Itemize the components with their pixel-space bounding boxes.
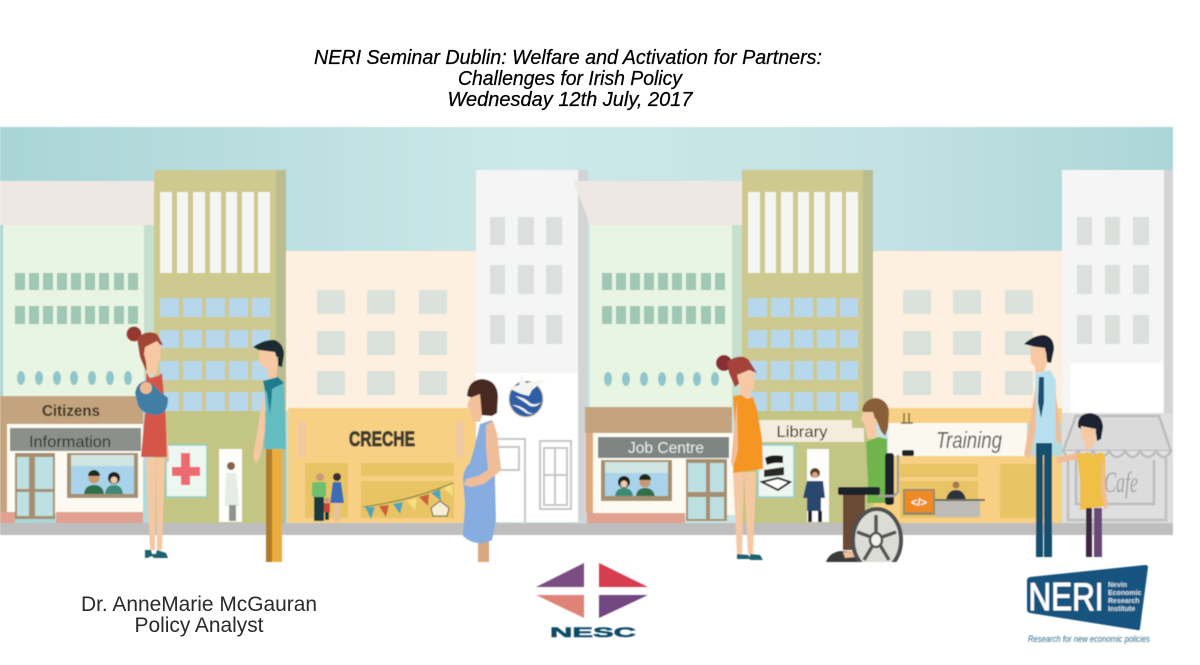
title: Wednesday 12th July, 2017 (448, 89, 693, 111)
icon: books panel (758, 445, 794, 497)
logo: NERI: Research (1108, 598, 1140, 605)
logo: NERI: Economic (1108, 590, 1142, 597)
logo: NERI (1027, 565, 1150, 644)
shop: Job Centre (585, 407, 735, 523)
person: woman with baby (126, 326, 169, 558)
author credit (81, 593, 317, 637)
shop: Creche: CRECHE (349, 428, 415, 451)
logo: NERI: NERI (1028, 576, 1104, 619)
person: man in teal shirt (253, 340, 286, 562)
title (314, 47, 822, 111)
logo: NESC: NESC (550, 624, 636, 640)
logo: NESC (536, 563, 648, 640)
building: right green office (573, 181, 742, 407)
title: Challenges for Irish Policy (458, 68, 683, 90)
shop: Creche (288, 408, 476, 525)
building: centre white (476, 170, 588, 522)
bunting (363, 483, 453, 519)
child in doorway (803, 449, 829, 522)
icon: red cross panel (166, 445, 207, 497)
shop: Citizens Information: Citizens (42, 403, 100, 420)
window with two staff (601, 460, 672, 501)
shop: Training: Training (936, 427, 1002, 453)
icon: orange laptop (903, 489, 935, 515)
shop: Citizens Information (0, 396, 143, 523)
shop: Job Centre: Job Centre (628, 440, 704, 457)
building: left olive tower (154, 170, 286, 525)
logo: NERI: Research for new economic policies (1028, 634, 1150, 644)
person: woman in orange dress (716, 355, 763, 560)
author credit: Dr. AnneMarie McGauran (81, 593, 317, 616)
title: NERI Seminar Dublin: Welfare and Activation for Partners: (314, 47, 822, 69)
door (686, 459, 727, 521)
door (15, 453, 55, 519)
sky (0, 127, 1173, 527)
pavement (0, 523, 1173, 535)
icon: bird emblem (508, 374, 546, 417)
icon: toy (431, 501, 449, 516)
receptionist and desk (935, 482, 985, 517)
door and window (495, 439, 571, 522)
wheelchair wheel (853, 509, 901, 571)
doctor in doorway (219, 449, 242, 522)
person: man in blue shirt (1024, 335, 1062, 557)
shop: Training (873, 413, 1062, 525)
family (312, 473, 344, 521)
logo: NERI: Nevin (1108, 582, 1127, 589)
shop: Citizens Information: Information (29, 434, 111, 451)
person: boy in yellow shirt (1057, 413, 1108, 557)
building: right white (1062, 170, 1173, 415)
building: left cream block (286, 251, 476, 411)
building: left green office (0, 181, 154, 400)
author credit: Policy Analyst (134, 614, 264, 637)
person: pregnant woman (463, 379, 501, 562)
icon: orange laptop: </> (911, 497, 927, 509)
street scene illustration (0, 127, 1173, 571)
person: woman in wheelchair (826, 398, 914, 571)
sign: Library: Library (776, 424, 828, 441)
logo: NERI: Institute (1108, 606, 1135, 613)
sign: Library (757, 420, 864, 442)
shop: Cafe: Cafe (1104, 466, 1138, 499)
window with two staff (67, 453, 138, 498)
building: right olive tower (742, 170, 873, 525)
building: right cream block (873, 251, 1062, 423)
shop: Cafe (1062, 413, 1173, 525)
